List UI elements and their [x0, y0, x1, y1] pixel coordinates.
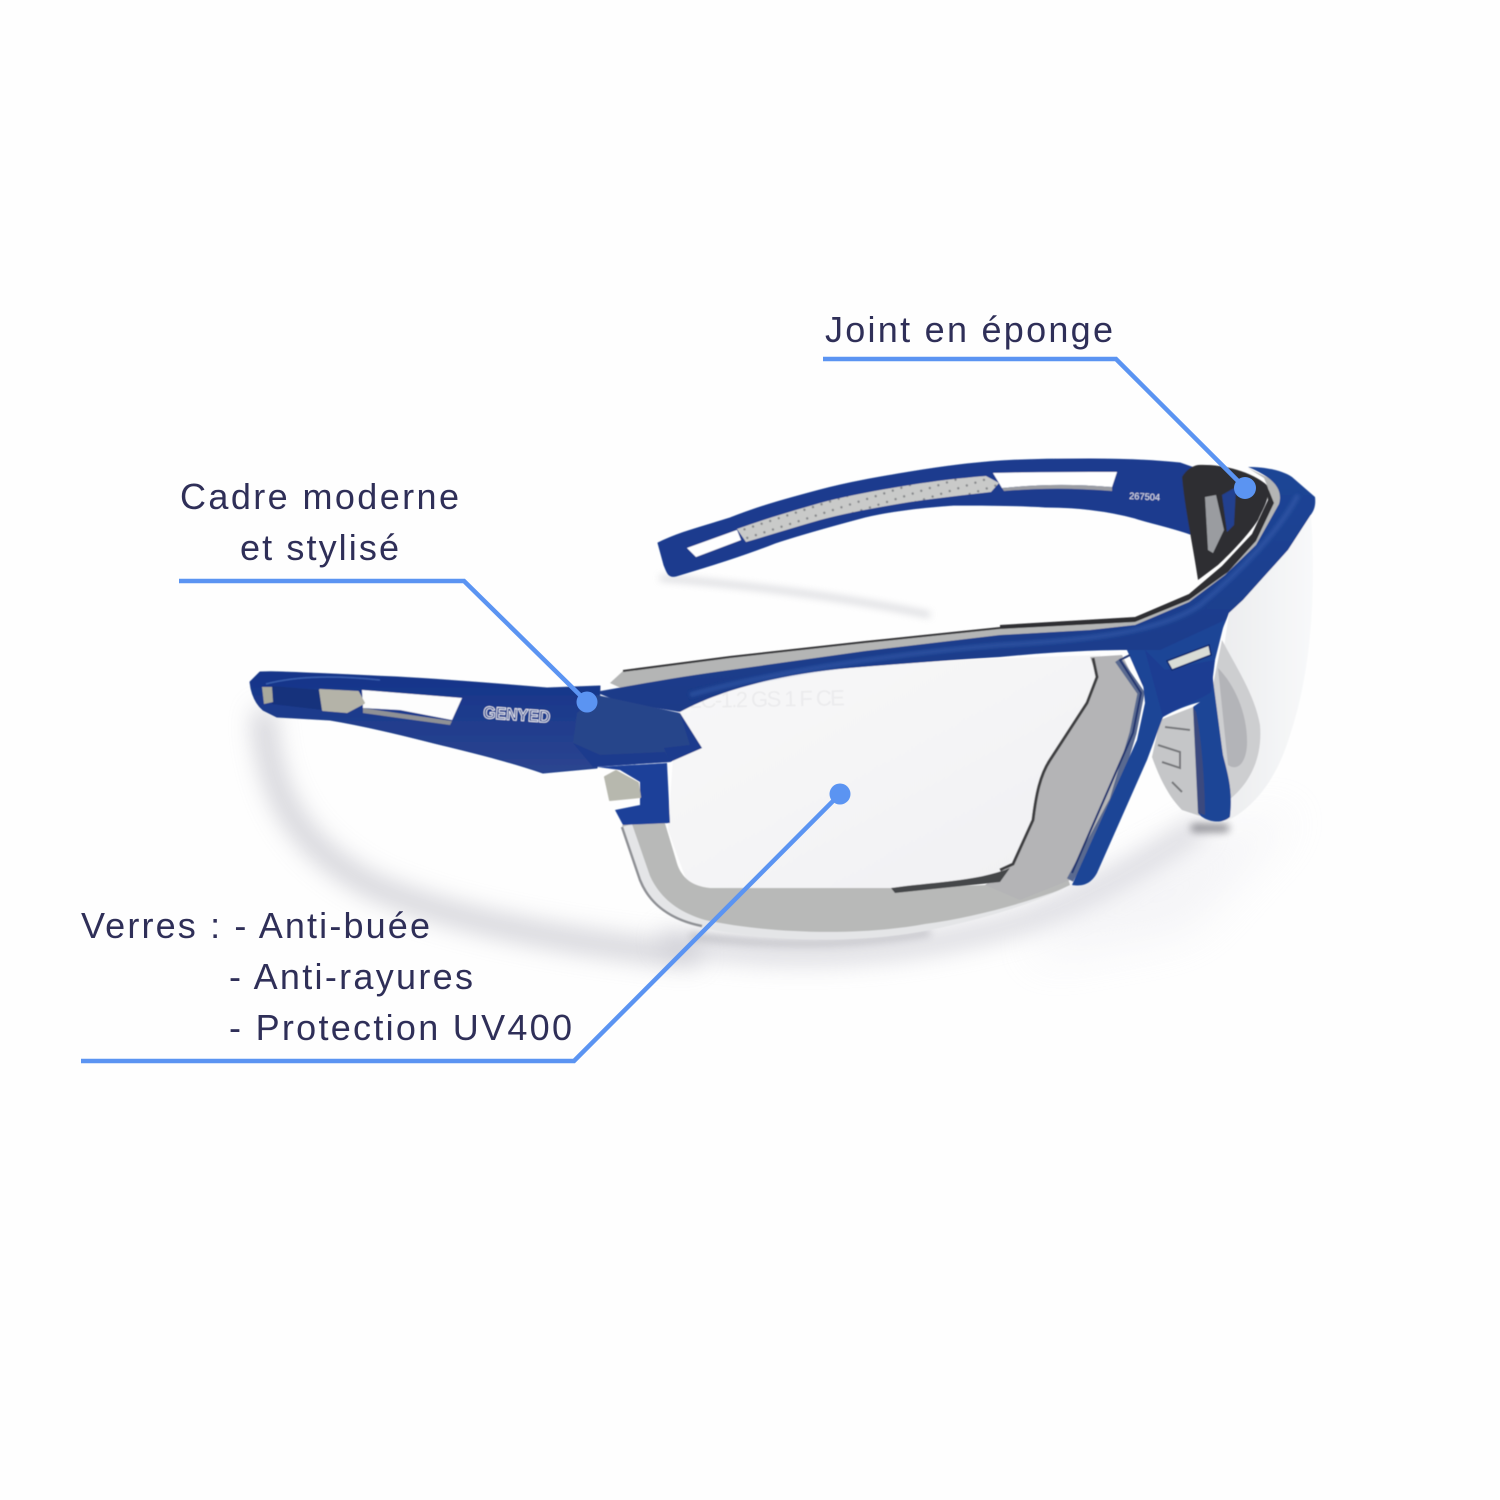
nose pad	[1152, 707, 1202, 816]
shadows under the glasses	[264, 578, 1300, 960]
clip on arm	[320, 690, 364, 712]
mesh pad	[737, 476, 999, 542]
clip at arm end	[262, 687, 273, 704]
hinge block	[573, 695, 702, 767]
faint lens marking: 2C-1.2 GS 1 F CE	[690, 685, 845, 713]
slot: far temple	[993, 472, 1117, 488]
photo: safety glasses	[250, 459, 1315, 940]
hinge lower piece	[597, 763, 670, 825]
callout: Cadre moderne et stylisé: et stylisé	[240, 527, 399, 568]
nose bridge frame	[1072, 620, 1231, 885]
foam band behind the top strip	[1000, 486, 1276, 633]
vent slot	[1167, 645, 1211, 670]
foam seal	[1182, 465, 1268, 580]
callout: Verres	[81, 784, 850, 1061]
callout: Verres: Verres : - Anti-buée	[81, 905, 430, 946]
callout: Joint en éponge	[823, 309, 1256, 499]
main frame top bar	[595, 467, 1315, 717]
near temple arm	[250, 672, 600, 773]
face gasket	[610, 468, 1284, 940]
callout: Cadre moderne et stylisé: Cadre moderne	[180, 476, 459, 517]
arm inner slot dark	[272, 686, 323, 710]
front lens	[668, 655, 1130, 905]
gasket top strip	[610, 468, 1284, 690]
clip on hinge	[605, 771, 640, 800]
far temple arm	[658, 459, 1200, 576]
model number: 267504	[1129, 491, 1160, 504]
arm slot	[362, 690, 462, 720]
bar highlight	[690, 495, 1298, 695]
right lens	[1200, 515, 1313, 822]
callout: Joint en éponge: Joint en éponge	[825, 309, 1113, 350]
right gasket	[1210, 640, 1260, 800]
brand logo: GENYED	[483, 703, 551, 727]
callout: Cadre moderne et stylisé	[179, 476, 598, 712]
callout: Verres: - Protection UV400	[229, 1007, 572, 1048]
slot: far temple tip	[687, 530, 741, 557]
callout: Verres: - Anti-rayures	[229, 956, 473, 997]
